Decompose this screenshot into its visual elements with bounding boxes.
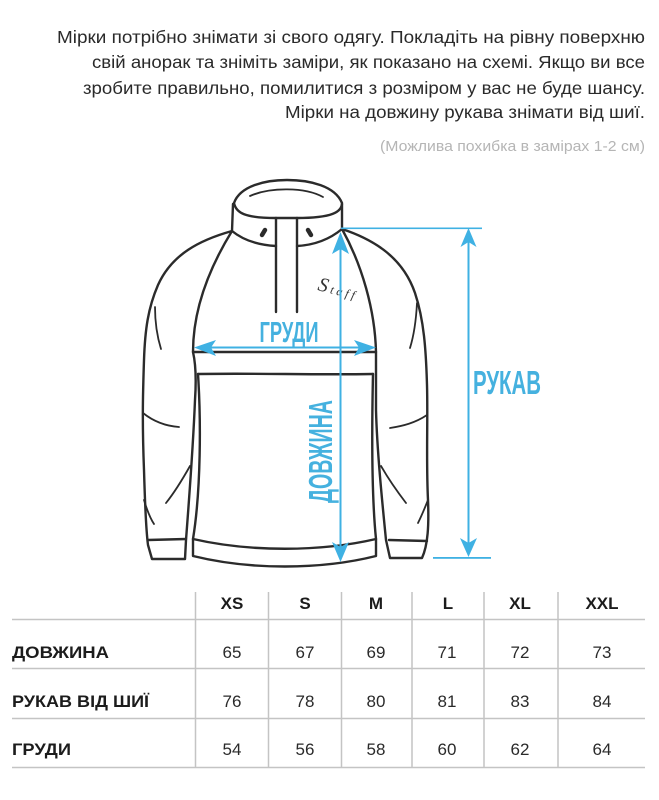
zip placket (276, 218, 297, 312)
row: chest (12, 740, 611, 759)
row: sleeve: 84 (593, 692, 611, 711)
left sleeve (143, 231, 232, 559)
row: chest: ГРУДИ (12, 740, 71, 759)
intro text: свій анорак та зніміть заміри, як показано на схемі. Якщо ви все (92, 52, 645, 72)
row: sleeve: 81 (438, 692, 456, 711)
row: sleeve: РУКАВ ВІД ШИЇ (12, 692, 150, 711)
row: length: ДОВЖИНА (12, 643, 109, 662)
row: chest: 56 (296, 740, 314, 759)
row: length (12, 643, 611, 662)
header row: L (443, 594, 453, 613)
row: chest: 64 (593, 740, 611, 759)
jacket outline (143, 180, 428, 566)
collar (232, 180, 342, 246)
length label: ДОВЖИНА (302, 400, 339, 503)
row: length: 72 (511, 643, 529, 662)
row: chest: 60 (438, 740, 456, 759)
header row: S (299, 594, 311, 613)
row: sleeve: 76 (223, 692, 241, 711)
header row (221, 594, 619, 613)
header row: M (369, 594, 383, 613)
length arrow (332, 232, 349, 562)
row: length: 67 (296, 643, 314, 662)
row: chest: 54 (223, 740, 241, 759)
row: chest: 62 (511, 740, 529, 759)
table grid (12, 592, 645, 768)
sleeve label: РУКАВ (473, 364, 541, 401)
right sleeve (342, 229, 428, 558)
row: length: 65 (223, 643, 241, 662)
intro text (57, 27, 645, 122)
row: chest: 58 (367, 740, 385, 759)
intro text: Мірки потрібно знімати зі свого одягу. Покладіть на рівну поверхню (57, 27, 645, 47)
header row: XXL (585, 594, 619, 613)
jacket body (193, 352, 376, 566)
row: sleeve: 80 (367, 692, 385, 711)
row: length: 73 (593, 643, 611, 662)
logo: Staff (316, 274, 360, 304)
row: length: 69 (367, 643, 385, 662)
size table (12, 592, 645, 768)
header row: XL (509, 594, 531, 613)
sleeve arrow (341, 228, 491, 559)
tolerance note: (Можлива похибка в замірах 1-2 см) (380, 138, 645, 155)
row: sleeve: 83 (511, 692, 529, 711)
row: length: 71 (438, 643, 456, 662)
chest label: ГРУДИ (260, 317, 318, 349)
intro text: зробите правильно, помилитися з розміром у вас не буде шансу. (83, 78, 645, 98)
intro text: Мірки на довжину рукава знімати від шиї. (285, 102, 645, 122)
chest arrow (194, 340, 376, 356)
header row: XS (221, 594, 243, 613)
row: sleeve (12, 692, 611, 711)
button holes (262, 230, 311, 235)
row: sleeve: 78 (296, 692, 314, 711)
